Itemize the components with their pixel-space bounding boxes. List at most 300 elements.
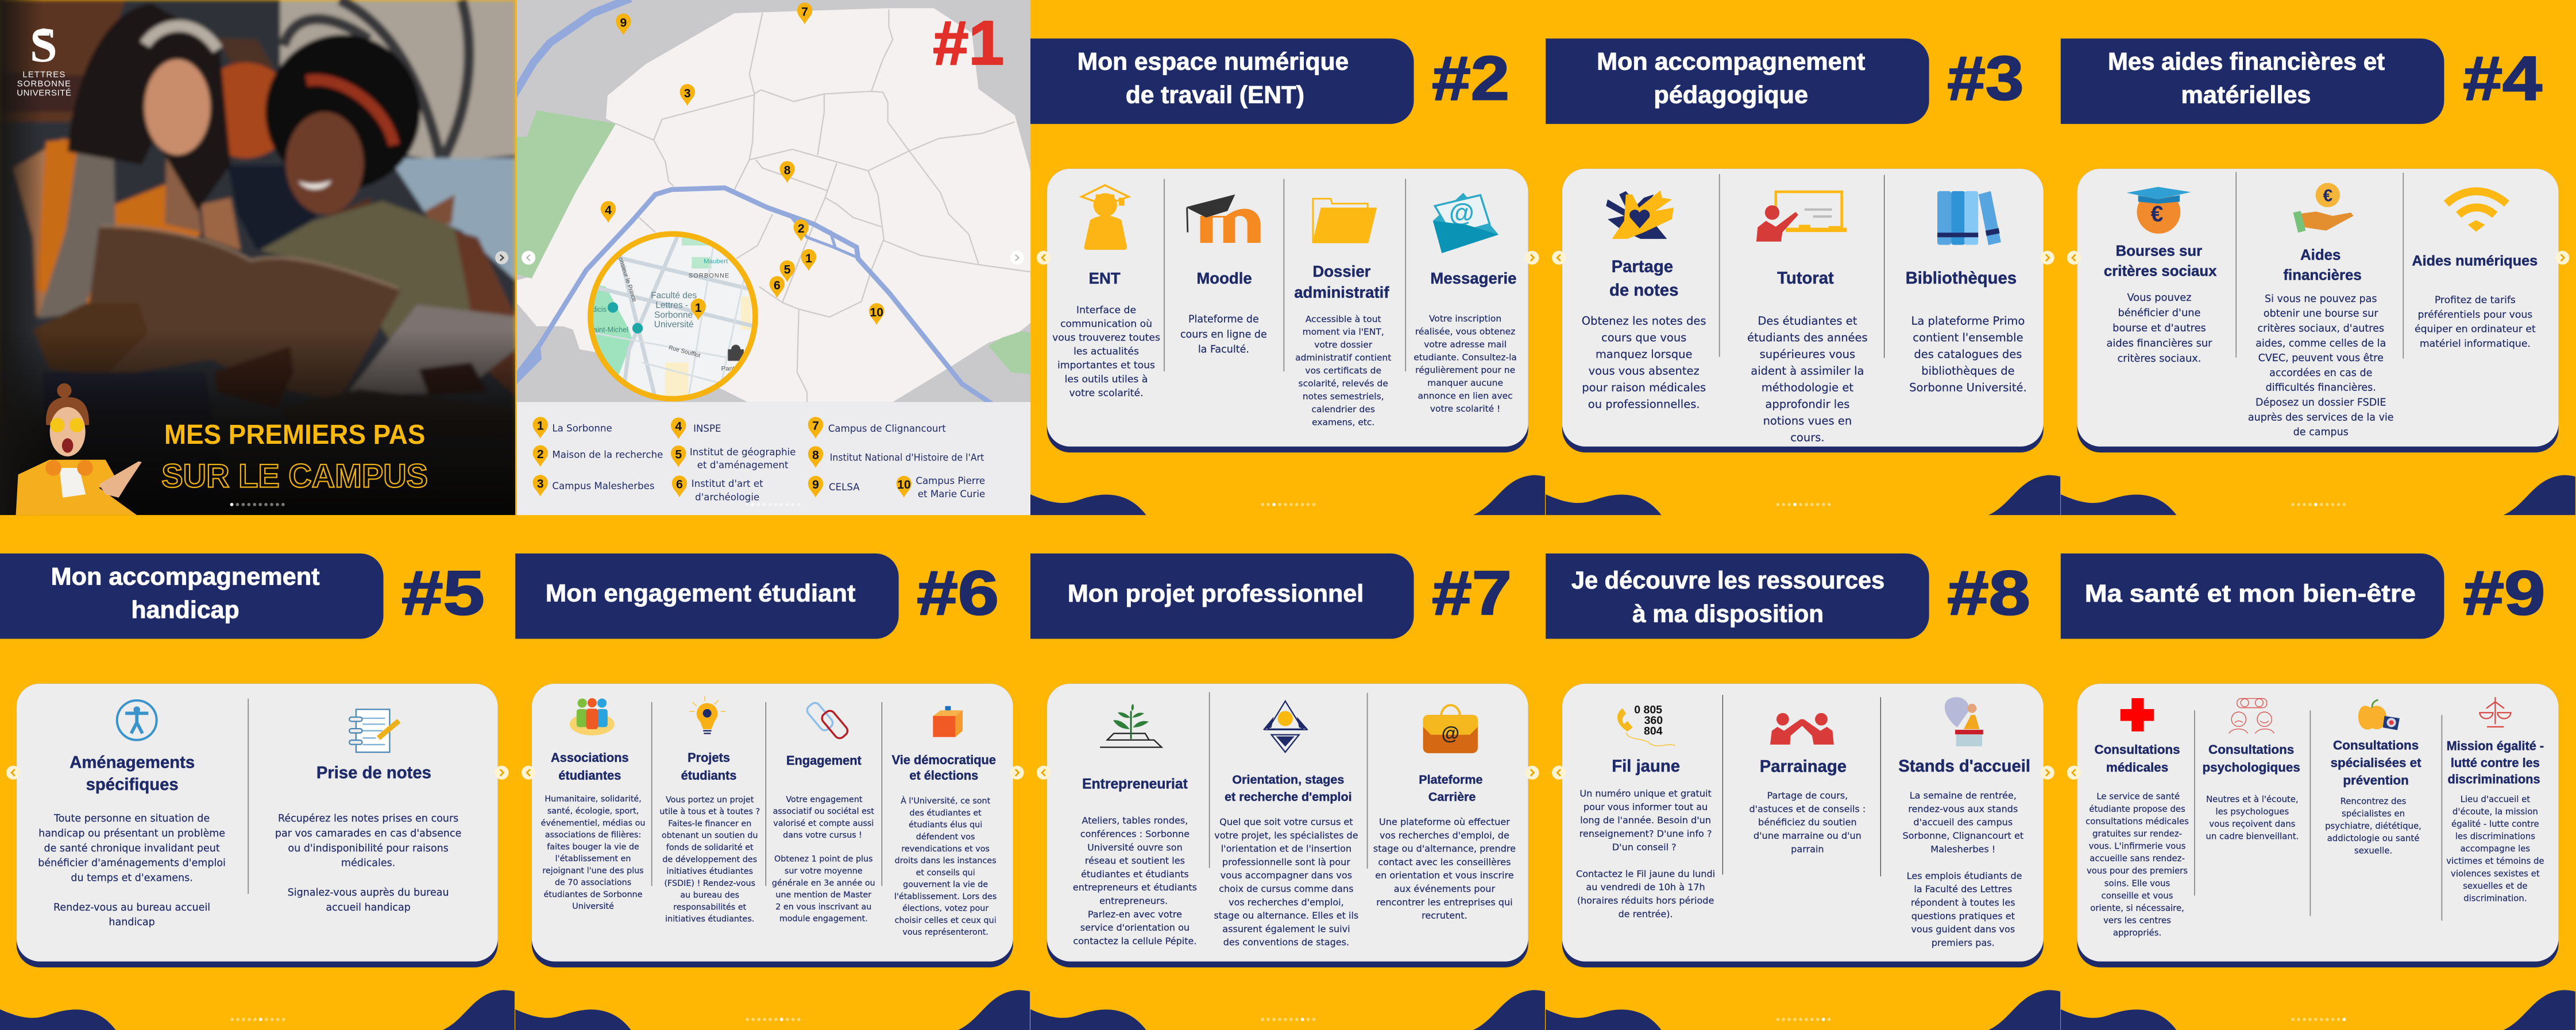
icon: plant bbox=[1100, 704, 1161, 748]
icon: welcome stand bbox=[1945, 697, 1983, 746]
heading: à ma disposition bbox=[1632, 600, 1824, 627]
heading: de travail (ENT) bbox=[1126, 82, 1304, 109]
column: Dossier administratif bbox=[1294, 262, 1391, 427]
column: Aménagements spécifiques bbox=[38, 754, 226, 928]
column: Associations étudiantes: faites bouger la vie de bbox=[547, 842, 639, 851]
number #7: #7 bbox=[1432, 558, 1512, 628]
inset map: Sorbonne neighbourhood: Lettres - bbox=[655, 301, 688, 311]
column: Fil jaune: (horaires réduits hors période bbox=[1577, 895, 1714, 906]
icon: ballot box bbox=[933, 706, 963, 737]
column: Projets étudiants: Faites-le financer en bbox=[668, 819, 751, 828]
icon: hands and heart bbox=[1606, 191, 1674, 239]
map legend: Campus Pierre bbox=[916, 475, 985, 486]
carousel arrow left bbox=[1552, 766, 1566, 780]
carousel arrow left bbox=[522, 766, 535, 780]
column: Mission égalité: d'écoute, la mission bbox=[2453, 806, 2538, 816]
column: Plateforme Carrière: Carrière bbox=[1428, 790, 1476, 804]
column: ENT: importantes et tous bbox=[1057, 360, 1155, 371]
map legend: Institut de géographie bbox=[690, 447, 795, 458]
panel: slide #5 disability support bbox=[0, 553, 515, 1030]
column: Consultations médicales: Consultations bbox=[2094, 742, 2180, 757]
title bar bbox=[2061, 38, 2444, 124]
column: Associations étudiantes: événementiel, médias ou bbox=[541, 819, 646, 828]
map pins: 6 bbox=[774, 279, 781, 292]
column: Entrepreneuriat: conférences : Sorbonne bbox=[1080, 828, 1189, 839]
panel: slide #9 health and wellbeing bbox=[2061, 553, 2575, 1030]
column: Associations étudiantes: rejoignant l'une des plus bbox=[542, 866, 644, 876]
card bbox=[532, 684, 1013, 967]
column: ENT bbox=[1052, 269, 1160, 399]
column: Consultations spécialisées et prévention: psychiatre, diététique, bbox=[2325, 820, 2421, 831]
column: Consultations spécialisées et prévention: sexuelle. bbox=[2354, 846, 2392, 856]
column: Consultations médicales: étudiante propose des bbox=[2089, 804, 2185, 814]
column: Projets étudiants: initiatives étudiantes bbox=[666, 867, 753, 876]
column: Orientation, stages et recherche d'emploi: stage ou alternance. Elles et ils bbox=[1214, 910, 1358, 921]
map legend: 4 bbox=[675, 420, 682, 433]
panel: slide #6 student engagement bbox=[515, 553, 1030, 1030]
wave decorations bbox=[1546, 990, 2060, 1030]
column: Associations étudiantes: étudiantes bbox=[558, 768, 621, 783]
map pins: 5 bbox=[784, 263, 791, 276]
column: Moodle bbox=[1180, 269, 1267, 355]
carousel arrow right bbox=[2555, 251, 2570, 265]
inset map: Sorbonne neighbourhood: Maubert bbox=[704, 258, 728, 265]
column: Moodle: cours en ligne de bbox=[1180, 329, 1267, 340]
column: Projets étudiants: Vous portez un projet bbox=[666, 795, 754, 804]
column: Orientation, stages et recherche d'emploi: l'orientation et de l'insertion bbox=[1221, 843, 1351, 854]
column: Plateforme Carrière: stage ou d'alternance, prendre bbox=[1373, 843, 1516, 854]
column: Vie démocratique: gouvernent la vie de bbox=[903, 880, 988, 889]
column: Parrainage: d'une marraine ou d'un bbox=[1754, 830, 1861, 841]
column: Aménagements spécifiques: handicap bbox=[109, 917, 155, 928]
column: ENT: votre scolarité. bbox=[1069, 388, 1144, 399]
column: Prise de notes: Récupérez les notes prises en cours bbox=[278, 813, 458, 824]
column: Plateforme Carrière: recrutent. bbox=[1422, 910, 1467, 921]
column: Aides numériques bbox=[2412, 253, 2538, 350]
column: Plateforme Carrière: Plateforme bbox=[1419, 773, 1482, 787]
column: Orientation, stages et recherche d'emploi: Orientation, stages bbox=[1232, 773, 1344, 787]
title bar bbox=[1546, 553, 1929, 639]
column: Mission égalité bbox=[2446, 739, 2544, 903]
carousel arrow left bbox=[2067, 251, 2081, 265]
logo: Lettres Sorbonne Université bbox=[17, 29, 71, 95]
carousel arrow right bbox=[1525, 766, 1539, 780]
icon: Moodle bbox=[1187, 195, 1261, 243]
title: sur le campus: SUR LE CAMPUS bbox=[161, 458, 428, 494]
icon: phone with Fil jaune number: 360 bbox=[1644, 714, 1663, 727]
icon: chain links bbox=[805, 701, 849, 740]
pagination dots bbox=[230, 503, 285, 506]
icon: rocket emblem bbox=[1263, 701, 1308, 752]
column: Consultations médicales: conseille et vous bbox=[2102, 890, 2173, 901]
column: Partage de notes: Partage bbox=[1612, 258, 1673, 276]
map of Paris bbox=[513, 0, 1031, 404]
column: Orientation, stages et recherche d'emploi: assurent également le suivi bbox=[1222, 923, 1350, 934]
column: Entrepreneuriat: Université ouvre son bbox=[1087, 842, 1183, 853]
column: Messagerie: réalisée, vous obtenez bbox=[1415, 327, 1515, 337]
pagination dots bbox=[230, 1018, 285, 1021]
wave decorations bbox=[1030, 475, 1545, 515]
icon: two people bbox=[1770, 713, 1834, 745]
icon: scholarship cap and euro: € bbox=[2151, 202, 2164, 227]
icon: phone with Fil jaune number: 0 805 bbox=[1634, 703, 1662, 716]
column: Orientation, stages et recherche d'emploi: professionnelle sont là pour bbox=[1222, 857, 1350, 868]
column: Entrepreneuriat: Entrepreneuriat bbox=[1082, 776, 1188, 792]
column: Bibliothèques: Bibliothèques bbox=[1906, 269, 2017, 288]
carousel arrow right bbox=[2041, 251, 2054, 265]
column: Plateforme Carrière: Une plateforme où effectuer bbox=[1379, 816, 1510, 827]
column: Moodle: Plateforme de bbox=[1188, 313, 1259, 325]
icon: scholarship cap and euro bbox=[2127, 187, 2191, 234]
column: Consultations médicales: Le service de santé bbox=[2096, 791, 2180, 801]
column: Aides financières: accordées en cas de bbox=[2269, 367, 2372, 379]
icon: red cross bbox=[2121, 698, 2154, 731]
column: Orientation, stages et recherche d'emploi: et recherche d'emploi bbox=[1225, 790, 1352, 804]
icon: briefcase: @ bbox=[1442, 723, 1459, 744]
icon: two faces with glasses bbox=[2229, 699, 2274, 733]
map legend: 6 bbox=[676, 478, 683, 491]
column: Stands d'accueil bbox=[1898, 757, 2030, 948]
column: Consultations médicales: oriente, si nécessaire, bbox=[2090, 903, 2184, 913]
column: Engagement bbox=[772, 753, 875, 924]
column: ENT: Interface de bbox=[1076, 304, 1136, 316]
heading: Ma santé et mon bien-être bbox=[2085, 580, 2416, 607]
column: Plateforme Carrière: contact avec les conseillères bbox=[1378, 857, 1511, 868]
column: Fil jaune: Un numéro unique et gratuit bbox=[1579, 788, 1712, 799]
column: Moodle: la Faculté. bbox=[1198, 344, 1249, 355]
heading bbox=[1597, 48, 1865, 109]
column: Partage de notes: manquez lorsque bbox=[1596, 347, 1693, 361]
number #3: #3 bbox=[1947, 43, 2023, 113]
heading: Mon accompagnement bbox=[1597, 48, 1865, 75]
icon: folder bbox=[1312, 199, 1377, 243]
icon: briefcase bbox=[1423, 705, 1478, 753]
column: Prise de notes: médicales. bbox=[341, 858, 395, 869]
column: Orientation, stages et recherche d'emploi bbox=[1214, 773, 1358, 948]
column: Bourses: critères sociaux bbox=[2104, 263, 2217, 279]
map legend: et d'aménagement bbox=[697, 460, 789, 471]
inset map: Sorbonne neighbourhood: SORBONNE bbox=[689, 272, 729, 279]
map legend: et Marie Curie bbox=[918, 489, 985, 499]
panel: slide #3 pedagogical support bbox=[1546, 38, 2060, 515]
column: Prise de notes: accueil handicap bbox=[326, 902, 411, 913]
inset map: Sorbonne neighbourhood: dicis bbox=[592, 305, 607, 313]
column: Aides financières: Aides bbox=[2300, 247, 2341, 263]
column: Mission égalité: lutté contre les bbox=[2451, 756, 2540, 770]
column: Prise de notes: ou d'indisponibilité pour raisons bbox=[288, 843, 449, 854]
column: Projets étudiants bbox=[659, 750, 760, 924]
wave decorations bbox=[0, 990, 515, 1030]
map legend: INSPE bbox=[693, 423, 721, 434]
column: Dossier administratif: administratif bbox=[1294, 283, 1389, 301]
title bar bbox=[0, 553, 384, 639]
column: Vie démocratique: et élections bbox=[909, 768, 978, 783]
column: Fil jaune: D'un conseil ? bbox=[1612, 842, 1677, 853]
pagination dots bbox=[1261, 503, 1315, 506]
column: Mission égalité: discrimination. bbox=[2463, 893, 2527, 903]
heading: Mon projet professionnel bbox=[1068, 580, 1364, 607]
column: Parrainage: Partage de cours, bbox=[1767, 790, 1848, 801]
column: Entrepreneuriat: réseau et soutient les bbox=[1085, 855, 1185, 866]
map pins: 1 bbox=[695, 301, 702, 315]
icon: wifi bbox=[2446, 191, 2507, 232]
column: Bibliothèques: La plateforme Primo bbox=[1911, 314, 2025, 327]
column: Consultations médicales: vous pour des premiers bbox=[2087, 866, 2188, 876]
column: ENT: vous trouverez toutes bbox=[1052, 332, 1160, 343]
dividers bbox=[1723, 695, 1880, 877]
column: Associations étudiantes: Humanitaire, solidarité, bbox=[544, 795, 642, 804]
column: Consultations médicales: vous. L'infirmerie vous bbox=[2089, 841, 2186, 851]
column: Aménagements spécifiques: spécifiques bbox=[86, 776, 179, 794]
column: Bibliothèques: Sorbonne Université. bbox=[1909, 381, 2027, 394]
column: Dossier administratif: notes semestriels, bbox=[1303, 391, 1384, 401]
photo of two students reading bbox=[0, 0, 515, 515]
column: Associations étudiantes: l'établissement en bbox=[555, 854, 631, 864]
icon: accessibility bbox=[117, 700, 157, 740]
column: Prise de notes: Signalez-vous auprès du bureau bbox=[288, 887, 449, 899]
column: Aménagements spécifiques: Rendez-vous au bureau accueil bbox=[53, 902, 210, 913]
column: Consultations médicales: accueille sans rendez- bbox=[2090, 853, 2185, 864]
column: ENT: ENT bbox=[1089, 269, 1121, 287]
column: Entrepreneuriat bbox=[1073, 776, 1197, 946]
column: Fil jaune bbox=[1576, 757, 1715, 919]
inset map: Sorbonne neighbourhood: aint-Michel bbox=[593, 326, 628, 334]
column: Aides financières: obtenir une bourse sur bbox=[2264, 308, 2378, 320]
column: Engagement: sur votre moyenne bbox=[785, 866, 863, 876]
column: Projets étudiants: étudiants bbox=[681, 768, 737, 783]
heading: Mes aides financières et bbox=[2108, 48, 2385, 75]
carousel arrow right bbox=[1010, 766, 1024, 780]
carousel arrow left bbox=[1552, 251, 1566, 265]
column: Aménagements spécifiques: Aménagements bbox=[69, 754, 195, 772]
column: Aides numériques: Profitez de tarifs bbox=[2435, 295, 2516, 306]
illustration: surprised student in yellow hoodie bbox=[16, 384, 142, 515]
column: Consultations spécialisées et prévention: addictologie ou santé bbox=[2327, 833, 2419, 843]
column: Fil jaune: au vendredi de 10h à 17h bbox=[1586, 882, 1705, 893]
column: Bourses: Vous pouvez bbox=[2127, 292, 2192, 304]
icon: light bulb bbox=[689, 696, 725, 733]
heading: Mon espace numérique bbox=[1077, 48, 1349, 75]
dividers bbox=[1164, 179, 1405, 371]
column: Partage de notes: vous vous absentez bbox=[1589, 365, 1700, 378]
column: Parrainage: parrain bbox=[1791, 843, 1824, 854]
dividers bbox=[1718, 174, 1720, 357]
column: Fil jaune: de rentrée). bbox=[1618, 908, 1673, 919]
icon: phone with Fil jaune number bbox=[1617, 703, 1675, 746]
column: Aides financières: Déposez un dossier FSDIE bbox=[2256, 397, 2386, 409]
column: Vie démocratique: élections, votez pour bbox=[902, 904, 988, 913]
card bbox=[17, 684, 498, 967]
pagination dots bbox=[1776, 1018, 1830, 1021]
column: Partage de notes: de notes bbox=[1609, 281, 1678, 300]
column: Vie démocratique: droits dans les instances bbox=[895, 857, 997, 866]
column: Moodle: Moodle bbox=[1196, 269, 1252, 287]
map pins: 3 bbox=[684, 87, 691, 100]
pagination dots bbox=[1261, 1018, 1315, 1021]
column: Parrainage bbox=[1749, 758, 1866, 854]
inset map: Sorbonne neighbourhood: Faculté des bbox=[651, 291, 697, 300]
carousel arrows bbox=[522, 251, 1024, 265]
column: Consultations spécialisées et prévention: spécialistes en bbox=[2342, 808, 2405, 819]
column: Dossier administratif: vos certificats de bbox=[1305, 366, 1381, 376]
heading: pédagogique bbox=[1654, 82, 1808, 109]
column: Consultations médicales: gratuites sur rendez- bbox=[2092, 828, 2182, 839]
column: Stands d'accueil: Stands d'accueil bbox=[1898, 757, 2030, 776]
column: Projets étudiants: fonds de solidarité et bbox=[666, 843, 754, 852]
column: Plateforme Carrière bbox=[1373, 773, 1516, 921]
map legend: 1 bbox=[537, 419, 544, 432]
carousel arrow right bbox=[1525, 251, 1539, 265]
map pins: 7 bbox=[801, 6, 808, 19]
column: Orientation, stages et recherche d'emploi: Quel que soit votre cursus et bbox=[1219, 816, 1353, 827]
column: Projets étudiants: de développement des bbox=[662, 855, 757, 864]
column: Aménagements spécifiques: de santé chronique invalidant peut bbox=[44, 843, 220, 854]
carousel arrow left bbox=[1037, 251, 1051, 265]
column: Consultations médicales: vers les centres bbox=[2103, 915, 2171, 926]
dividers bbox=[651, 702, 652, 886]
carousel arrow left bbox=[2067, 766, 2081, 780]
number #4: #4 bbox=[2463, 43, 2542, 113]
column: Entrepreneuriat: Ateliers, tables rondes, bbox=[1082, 815, 1188, 826]
column: Bibliothèques: des catalogues des bbox=[1914, 347, 2022, 361]
column: Aménagements spécifiques: Toute personne en situation de bbox=[53, 813, 210, 824]
column: Bibliothèques: bibliothèques de bbox=[1921, 365, 2015, 378]
card bbox=[1562, 169, 2044, 452]
dividers bbox=[1210, 692, 1368, 869]
column: Fil jaune: renseignement? D'une info ? bbox=[1579, 828, 1712, 839]
map legend: 2 bbox=[537, 448, 544, 461]
column: Aides numériques: équiper en ordinateur et bbox=[2415, 324, 2536, 335]
column: Engagement: module engagement. bbox=[779, 915, 868, 924]
column: Consultations psychologiques: vous reçoivent dans bbox=[2209, 819, 2296, 829]
map pins: 1 bbox=[805, 252, 812, 265]
column: Stands d'accueil: Sorbonne, Clignancourt et bbox=[1902, 830, 2023, 841]
wave decorations bbox=[2061, 475, 2575, 515]
column: Consultations médicales: médicales bbox=[2106, 760, 2168, 775]
column: Vie démocratique: défendent vos bbox=[916, 832, 975, 842]
column: Associations étudiantes: Associations bbox=[551, 750, 629, 765]
pagination dots bbox=[746, 1018, 800, 1021]
logo: Lettres Sorbonne Université: S bbox=[30, 17, 57, 72]
divider bbox=[248, 699, 249, 894]
panel: slide #7 career project bbox=[1030, 553, 1545, 1030]
column: Associations étudiantes: santé, écologie, sport, bbox=[547, 807, 639, 816]
column: Tutorat: supérieures vous bbox=[1760, 347, 1855, 361]
title bar bbox=[515, 553, 899, 639]
map pins: 9 bbox=[620, 16, 627, 29]
column: Associations étudiantes: étudiantes de Sorbonne bbox=[544, 890, 643, 899]
icon: phone with Fil jaune number: 804 bbox=[1644, 725, 1663, 738]
map legend: Campus de Clignancourt bbox=[828, 423, 946, 434]
card bbox=[2077, 169, 2559, 452]
column: Aides financières: financières bbox=[2283, 267, 2362, 283]
pagination dots bbox=[2291, 1018, 2346, 1021]
column: Associations étudiantes: Université bbox=[572, 902, 614, 911]
number #1: #1 bbox=[933, 8, 1004, 78]
column: Bourses: critères sociaux. bbox=[2118, 353, 2201, 365]
map legend: 9 bbox=[812, 478, 819, 491]
column: Orientation, stages et recherche d'emploi: vos recherches d'emploi, bbox=[1229, 897, 1344, 908]
map legend bbox=[515, 402, 1031, 516]
map pins: 2 bbox=[798, 222, 805, 235]
icon: envelope: @ bbox=[1449, 199, 1474, 227]
column: Prise de notes: par vos camarades en cas d'absence bbox=[275, 828, 461, 839]
column: Engagement: associatif ou sociétal est bbox=[773, 807, 874, 816]
column: Messagerie: Messagerie bbox=[1430, 269, 1516, 287]
column: Aides numériques: Aides numériques bbox=[2412, 253, 2538, 269]
column: Partage de notes: ou professionnelles. bbox=[1588, 398, 1700, 411]
column: Tutorat: cours. bbox=[1790, 431, 1825, 444]
column: Projets étudiants: (FSDIE) ! Rendez-vous bbox=[664, 879, 755, 888]
column: Bibliothèques: contient l'ensemble bbox=[1913, 331, 2023, 344]
panel: cover photo slide bbox=[0, 0, 515, 515]
column: Dossier administratif: examens, etc. bbox=[1312, 417, 1374, 427]
column: Stands d'accueil: répondent à toutes les bbox=[1911, 897, 2015, 908]
column: Aides financières: difficultés financières. bbox=[2266, 382, 2376, 394]
column: ENT: les outils utiles à bbox=[1065, 374, 1148, 385]
map legend: 3 bbox=[537, 477, 544, 490]
dividers bbox=[2236, 172, 2403, 358]
column: Aides financières bbox=[2248, 247, 2394, 438]
column: Engagement: générale en 3e année ou bbox=[772, 878, 875, 888]
column: Stands d'accueil: Malesherbes ! bbox=[1930, 843, 1995, 854]
logo: Lettres Sorbonne Université: SORBONNE bbox=[17, 79, 71, 88]
column: Mission égalité: sexuelles et de bbox=[2463, 881, 2528, 891]
column: Prise de notes: Prise de notes bbox=[316, 764, 431, 782]
column: Messagerie: Votre inscription bbox=[1429, 313, 1501, 324]
column: Vie démocratique: revendications et vos bbox=[901, 845, 990, 854]
panel: slide #2 digital workspace bbox=[1030, 38, 1545, 515]
heading: Mon accompagnement bbox=[51, 563, 319, 590]
column: Fil jaune: Fil jaune bbox=[1612, 757, 1680, 776]
pagination dots bbox=[1776, 503, 1830, 506]
column: Associations étudiantes bbox=[541, 750, 646, 911]
column: Messagerie: votre adresse mail bbox=[1424, 339, 1507, 350]
column: Dossier administratif: Dossier bbox=[1312, 262, 1371, 280]
column: Partage de notes bbox=[1582, 258, 1706, 411]
column: Plateforme Carrière: en orientation et vous inscrire bbox=[1375, 870, 1514, 881]
title: mes premiers pas: MES PREMIERS PAS bbox=[164, 419, 425, 450]
map pins: 8 bbox=[784, 164, 791, 177]
column: Messagerie bbox=[1413, 269, 1517, 414]
column: Bourses bbox=[2104, 243, 2217, 365]
column: Bourses: Bourses sur bbox=[2116, 243, 2202, 259]
logo: Lettres Sorbonne Université: LETTRES bbox=[22, 69, 65, 79]
column: Consultations spécialisées et prévention: Rencontrez des bbox=[2341, 796, 2407, 806]
column: Vie démocratique: l'établissement. Lors des bbox=[894, 892, 997, 901]
column: Mission égalité: Mission égalité - bbox=[2447, 739, 2544, 753]
heading: Mon engagement étudiant bbox=[546, 579, 855, 606]
column: Bibliothèques bbox=[1906, 269, 2027, 394]
column: Projets étudiants: obtenant un soutien du bbox=[662, 831, 758, 841]
column: Vie démocratique bbox=[892, 753, 997, 937]
column: Dossier administratif: scolarité, relevés de bbox=[1299, 378, 1388, 389]
column: Messagerie: régulièrement pour ne bbox=[1415, 365, 1515, 375]
column: Aides numériques: préférentiels pour vous bbox=[2417, 309, 2532, 320]
map legend: Maison de la recherche bbox=[552, 449, 663, 460]
column: Stands d'accueil: vous guident dans vos bbox=[1911, 924, 2015, 935]
number #6: #6 bbox=[917, 558, 999, 628]
column: ENT: les actualités bbox=[1073, 346, 1139, 358]
number #9: #9 bbox=[2463, 558, 2546, 628]
column: Mission égalité: discriminations bbox=[2448, 772, 2540, 787]
heading bbox=[51, 563, 319, 624]
column: Aménagements spécifiques: handicap ou présentant un problème bbox=[38, 828, 225, 839]
column: Stands d'accueil: premiers pas. bbox=[1932, 937, 1995, 948]
column: Associations étudiantes: associations de filières: bbox=[545, 831, 641, 840]
column: Entrepreneuriat: étudiantes et étudiants bbox=[1081, 869, 1189, 880]
column: Entrepreneuriat: Parlez-en avec votre bbox=[1088, 909, 1182, 920]
